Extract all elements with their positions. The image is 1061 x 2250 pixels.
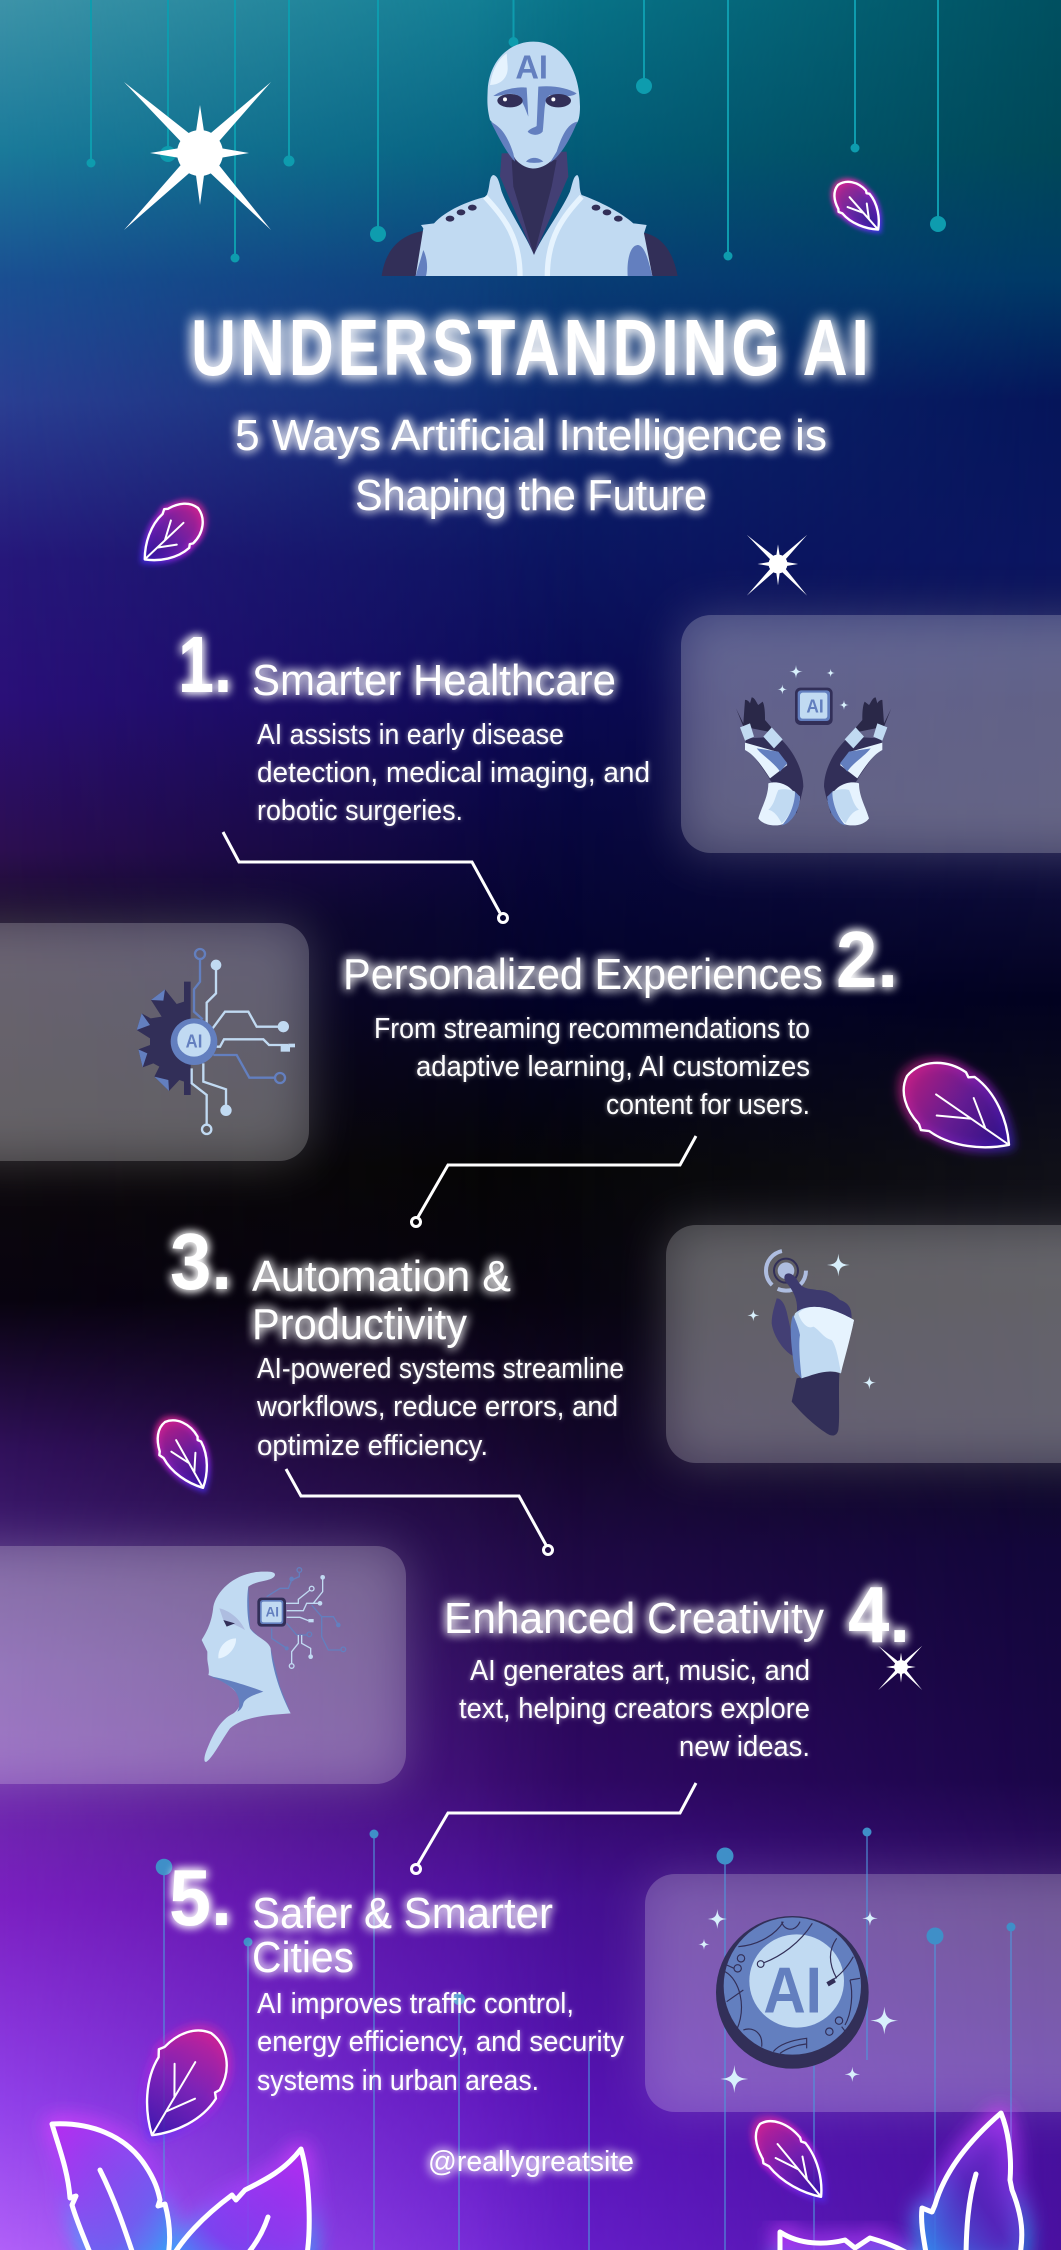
panel: gear image	[0, 923, 309, 1161]
section 2 text: content for users.	[606, 1089, 810, 1121]
leaf: left under subtitle	[129, 492, 214, 576]
icon: robot portrait: AI	[515, 49, 548, 86]
section 2 text: From streaming recommendations to	[374, 1013, 810, 1045]
section 5 text: energy efficiency, and security	[257, 2026, 624, 2058]
section 2 text	[374, 1013, 810, 1121]
subtitle	[235, 411, 827, 520]
leaf: right of section 2	[886, 1045, 1030, 1175]
panel: head image	[0, 1546, 406, 1784]
section 1 heading	[178, 620, 616, 709]
section 3 heading: Productivity	[252, 1300, 467, 1349]
section 3 text: workflows, reduce errors, and	[256, 1391, 618, 1423]
section 4 heading: Enhanced Creativity	[444, 1594, 824, 1643]
section 4 text: text, helping creators explore	[459, 1693, 810, 1725]
section 5 heading: 5.	[169, 1853, 232, 1942]
section 1 text: detection, medical imaging, and	[257, 757, 650, 789]
section 2 heading	[343, 915, 898, 1004]
title: UNDERSTANDING AI	[191, 304, 869, 393]
leaf: left of section 3	[146, 1411, 222, 1499]
icon: robot hand pressing button	[747, 1251, 876, 1436]
hanging lines top	[86, 0, 946, 262]
section 1 text: AI assists in early disease	[257, 719, 564, 751]
subtitle: 5 Ways Artificial Intelligence is	[235, 411, 827, 460]
hanging lines bottom	[156, 1828, 1015, 2250]
icon: small star	[747, 535, 807, 596]
arrow: connector 4 to 5	[412, 1783, 696, 1874]
section 4 text: AI generates art, music, and	[470, 1655, 810, 1687]
section 2 text: adaptive learning, AI customizes	[416, 1051, 810, 1083]
section 5 text	[257, 1988, 624, 2097]
section 5 text: AI improves traffic control,	[257, 1988, 574, 2020]
section 3 text: optimize efficiency.	[257, 1430, 488, 1462]
icon: large star top left	[124, 82, 271, 230]
section 3 text: AI-powered systems streamline	[257, 1353, 624, 1385]
section 1 heading: Smarter Healthcare	[252, 656, 616, 705]
handle: @reallygreatsite	[428, 2146, 634, 2178]
section 2 heading: 2.	[836, 915, 898, 1004]
section 3 heading: 3.	[170, 1217, 232, 1306]
arrow: connector 3 to 4	[286, 1469, 552, 1554]
section 3 heading: Automation &	[252, 1252, 511, 1301]
icon: AI gear circuit	[137, 949, 295, 1134]
section 5 heading	[169, 1853, 553, 1982]
icon: robot portrait	[382, 42, 678, 276]
section 4 heading	[444, 1570, 910, 1659]
section 5 text: systems in urban areas.	[257, 2065, 539, 2097]
section 1 text	[257, 719, 650, 827]
section 5 heading: Safer & Smarter	[252, 1889, 553, 1938]
icon: AI orb: AI	[763, 1954, 822, 2027]
plant: bottom right neon leaves	[780, 2113, 1022, 2250]
icon: robot hands with chip	[736, 665, 891, 826]
leaf: lower right	[743, 2109, 838, 2211]
icon: robot hands with chip: AI	[806, 695, 824, 716]
section 5 heading: Cities	[252, 1933, 354, 1982]
icon: AI head profile: AI	[266, 1604, 279, 1620]
leaf: top right	[825, 173, 891, 241]
panel: touch hand image	[666, 1225, 1061, 1463]
section 4 text	[459, 1655, 810, 1763]
section 1 heading: 1.	[178, 620, 232, 709]
icon: AI gear circuit: AI	[186, 1030, 202, 1051]
arrow: connector 2 to 3	[412, 1136, 696, 1226]
arrow: connector 1 to 2	[223, 832, 508, 922]
icon: AI orb	[698, 1909, 898, 2093]
leaf: lower left	[120, 2014, 243, 2154]
panel: healthcare image	[681, 615, 1061, 853]
section 4 text: new ideas.	[679, 1731, 810, 1763]
icon: star near section 4	[878, 1646, 922, 1690]
plant: bottom left neon leaves	[52, 2124, 309, 2250]
section 2 heading: Personalized Experiences	[343, 950, 823, 999]
subtitle: Shaping the Future	[355, 471, 707, 520]
panel: AI orb image	[645, 1874, 1061, 2112]
section 4 heading: 4.	[848, 1570, 910, 1659]
section 3 text	[256, 1353, 624, 1462]
section 1 text: robotic surgeries.	[257, 795, 463, 827]
section 3 heading	[170, 1217, 511, 1349]
icon: AI head profile	[202, 1568, 346, 1762]
